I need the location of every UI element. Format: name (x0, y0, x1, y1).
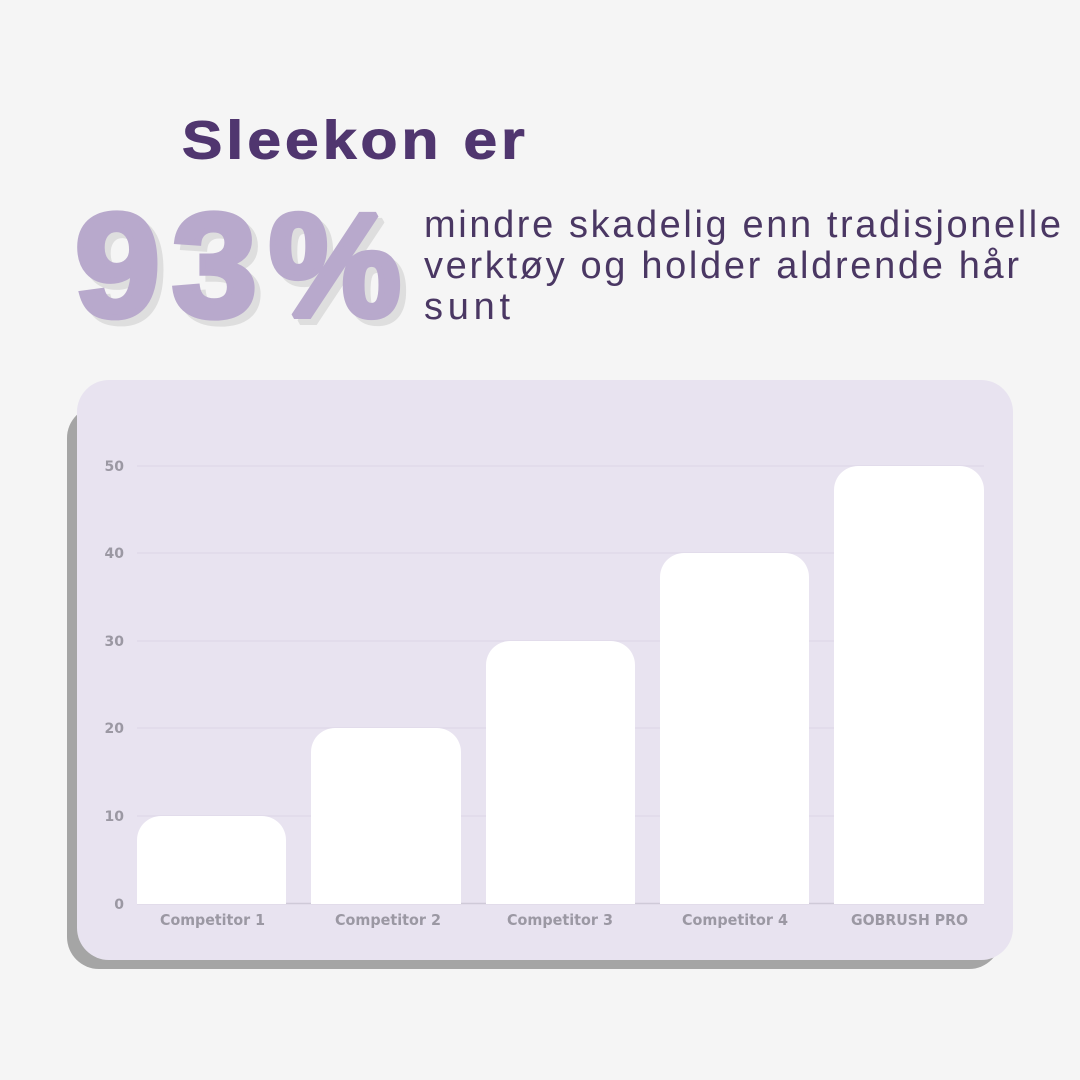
bar: GOBRUSH PRO (834, 466, 984, 904)
y axis labels (105, 459, 124, 913)
panel shadow (67, 406, 1001, 969)
description text: verktøy og holder aldrende hår (424, 245, 1019, 287)
x axis labels (160, 911, 968, 929)
big number: 93% (75, 183, 407, 354)
bar: Competitor 4 (660, 553, 809, 904)
x axis labels: Competitor 3 (507, 911, 613, 929)
y axis labels: 40 (105, 546, 124, 562)
y axis labels: 20 (105, 721, 124, 737)
big number: 93%: 3 (178, 189, 263, 353)
big number: 93%: 9 (75, 183, 160, 347)
big number: 93%: 9 (81, 189, 166, 353)
x axis labels: Competitor 2 (335, 911, 441, 929)
bar: Competitor 3 (486, 641, 635, 904)
big number: 93%: % (269, 184, 401, 348)
bar: Competitor 1 (137, 816, 286, 904)
x axis labels: Competitor 4 (682, 911, 788, 929)
y axis labels: 0 (114, 897, 124, 913)
x axis labels: Competitor 1 (160, 911, 265, 929)
y axis labels: 30 (105, 634, 124, 650)
description text: mindre skadelig enn tradisjonelle (424, 204, 1061, 246)
description text: sunt (424, 286, 510, 328)
title: Sleekon er (182, 110, 525, 171)
description text (424, 204, 1061, 328)
y axis labels: 10 (105, 809, 124, 825)
y axis labels: 50 (105, 459, 124, 475)
bar: Competitor 2 (311, 728, 461, 904)
big number: 93%: % (275, 190, 407, 354)
x axis labels: GOBRUSH PRO (851, 911, 968, 929)
big number: 93%: 3 (172, 183, 257, 347)
bar chart (105, 459, 984, 929)
panel: bar chart background (77, 380, 1013, 960)
